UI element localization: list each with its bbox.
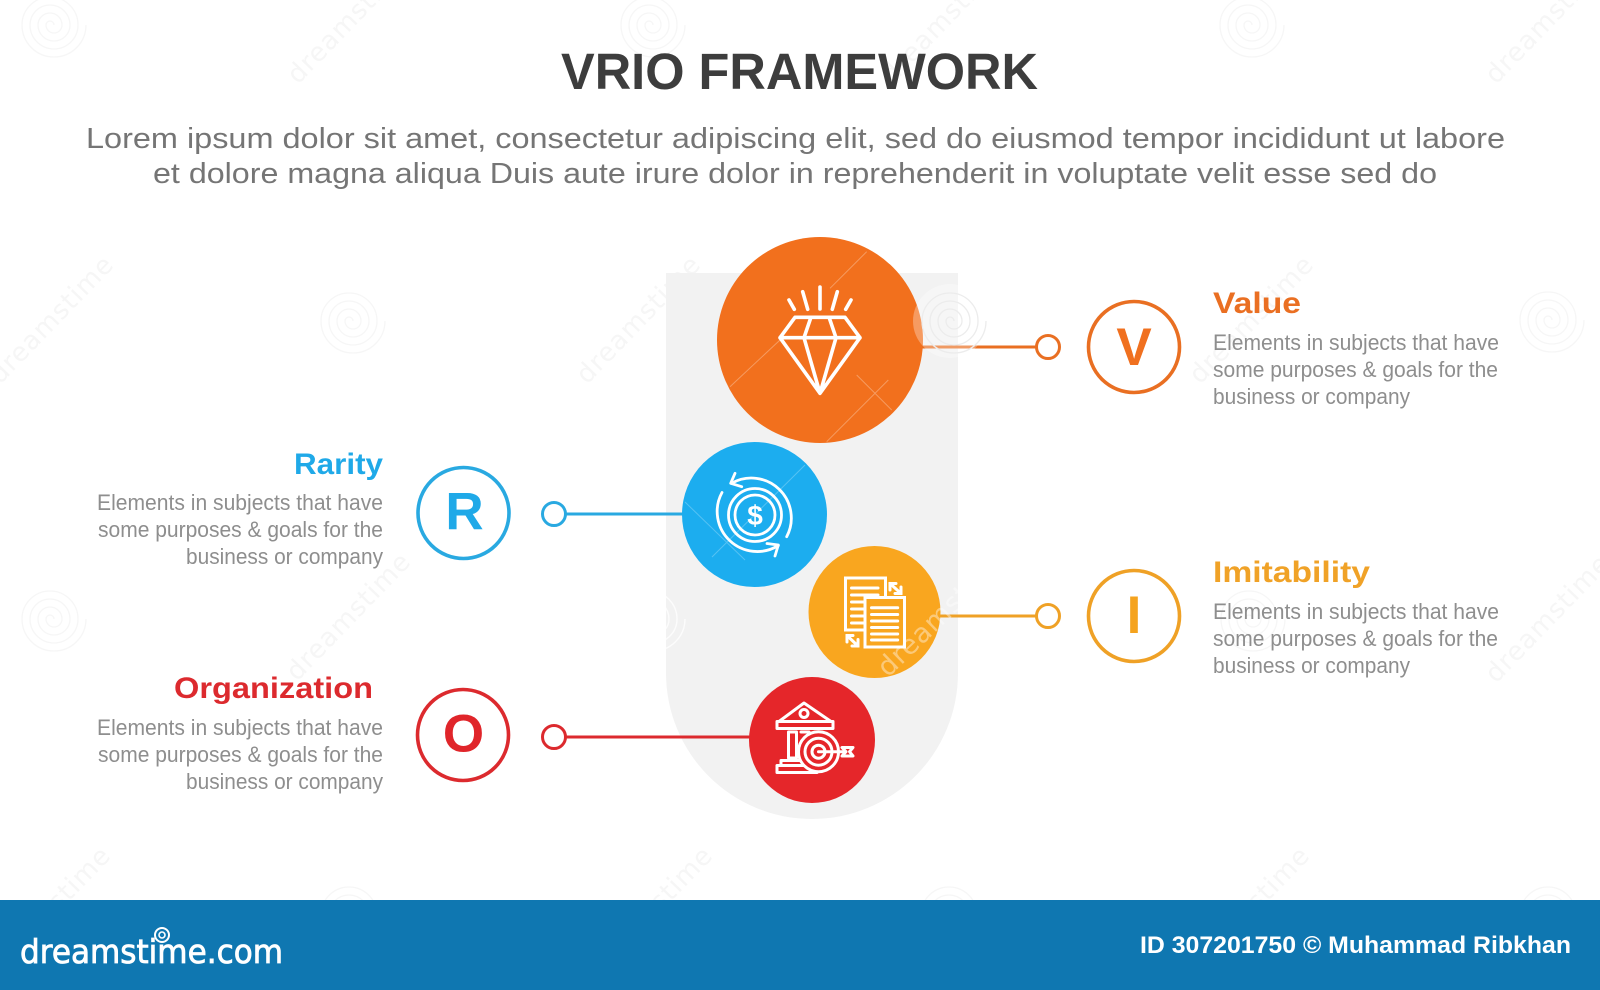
description: organization: some purposes & goals for the	[98, 742, 383, 767]
connector: rarity	[542, 502, 685, 526]
letter badge: I	[1088, 570, 1180, 662]
heading: Imitability: Imitability	[1213, 556, 1371, 589]
icon: bank building with target	[777, 703, 853, 772]
connector: organization	[542, 726, 752, 748]
description: value: some purposes & goals for the	[1213, 357, 1498, 382]
image credit: ID 307201750 © Muhammad Ribkhan	[1140, 932, 1571, 959]
description: rarity	[97, 490, 383, 569]
description: imitability: Elements in subjects that have	[1213, 599, 1499, 624]
panel: imitability	[1088, 556, 1499, 678]
letter badge: V	[1088, 302, 1180, 392]
text: dreamstime	[1179, 841, 1316, 981]
watermark spiral overlay	[913, 284, 987, 358]
circle: rarity	[682, 442, 827, 587]
letter badge: O: O	[443, 704, 484, 764]
heading: Value: Value	[1213, 287, 1301, 320]
letter badge: V: V	[1116, 318, 1152, 377]
icon: circular money flow	[717, 473, 791, 556]
subtitle text: et dolore magna aliqua Duis aute irure dolor in reprehenderit in voluptate velit esse sed do	[153, 158, 1437, 190]
letter badge: I: I	[1127, 586, 1141, 645]
heading: Organization: Organization	[174, 672, 373, 705]
letter badge: R: R	[445, 482, 484, 542]
icon: duplicate documents	[846, 578, 904, 647]
description: organization: Elements in subjects that have	[97, 715, 383, 740]
text: dreamstime	[570, 250, 707, 390]
description: rarity: business or company	[186, 544, 383, 569]
text: dreamstime	[1183, 250, 1320, 390]
description: rarity: some purposes & goals for the	[98, 517, 383, 542]
letter badge: R	[418, 468, 509, 558]
title: VRIO FRAMEWORK	[561, 43, 1038, 100]
heading: Rarity: Rarity	[294, 448, 384, 481]
icon: diamond	[780, 287, 860, 393]
description: value	[1213, 330, 1499, 409]
logo: dreamstime: dreamstime.com	[20, 932, 283, 971]
panel: rarity	[97, 448, 509, 569]
description: organization	[97, 715, 383, 794]
subtitle text: Lorem ipsum dolor sit amet, consectetur adipiscing elit, sed do eiusmod tempor incididunt ut labore	[86, 123, 1505, 155]
letter badge: O	[418, 690, 508, 780]
connector: value	[920, 336, 1060, 358]
description: value: business or company	[1213, 384, 1410, 409]
text: dreamstime	[280, 547, 417, 687]
connector: imitability	[938, 604, 1060, 628]
description: imitability: some purposes & goals for the	[1213, 626, 1498, 651]
text: dreamstime	[871, 543, 1015, 683]
icon: circular money flow: $	[747, 500, 763, 531]
text: dreamstime	[582, 841, 719, 981]
central grey capsule panel	[666, 273, 958, 819]
description: rarity: Elements in subjects that have	[97, 490, 383, 515]
circle: value	[717, 237, 923, 443]
circle: imitability	[808, 546, 940, 678]
circle: organization	[749, 677, 875, 803]
description: organization: business or company	[186, 769, 383, 794]
description: imitability: business or company	[1213, 653, 1410, 678]
panel: organization	[97, 672, 508, 794]
footer bar	[0, 900, 1600, 990]
description: imitability	[1213, 599, 1499, 678]
subtitle text	[86, 123, 1505, 190]
description: value: Elements in subjects that have	[1213, 330, 1499, 355]
panel: value	[1088, 287, 1499, 409]
